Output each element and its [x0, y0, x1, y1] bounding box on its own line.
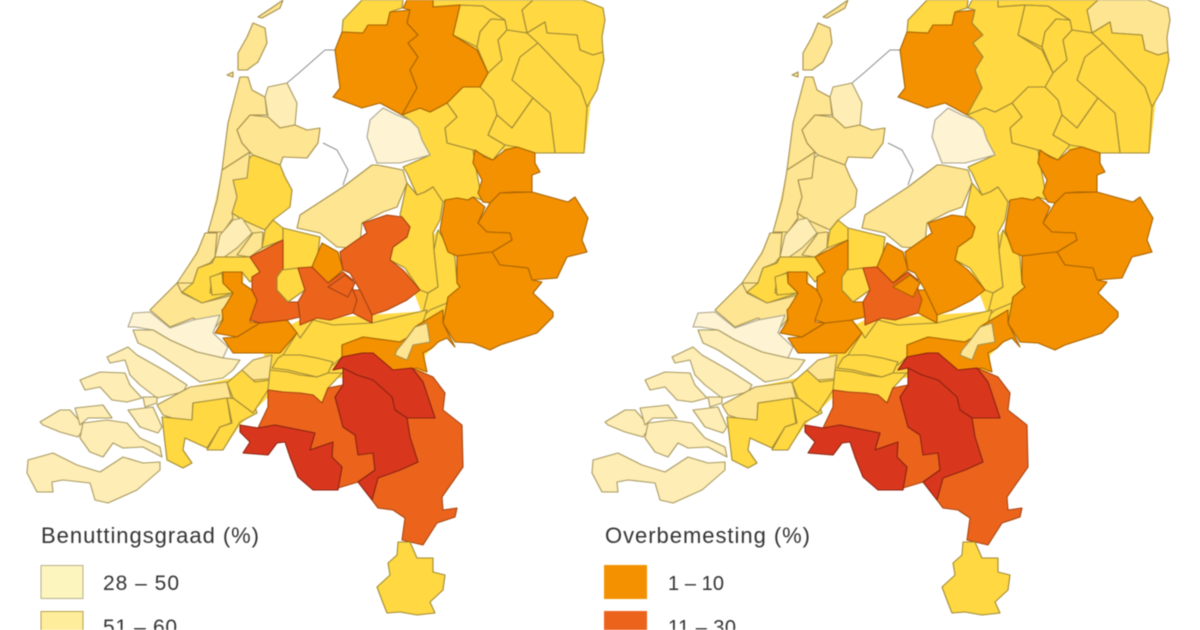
swatch 11-30	[604, 611, 647, 630]
legend: benuttingsgraad	[41, 523, 259, 630]
swatch 1-10	[604, 565, 647, 599]
swatch 28-50	[41, 566, 83, 598]
legend title left: Benuttingsgraad (%)	[41, 523, 259, 548]
map: overbemesting	[592, 0, 1170, 615]
legend: overbemesting	[604, 523, 810, 630]
label 28-50: 28 – 50	[103, 572, 179, 595]
label 1-10: 1 – 10	[668, 573, 724, 595]
map: benuttingsgraad	[27, 0, 605, 615]
swatch 51-60	[41, 612, 83, 630]
legend title right: Overbemesting (%)	[605, 523, 810, 548]
